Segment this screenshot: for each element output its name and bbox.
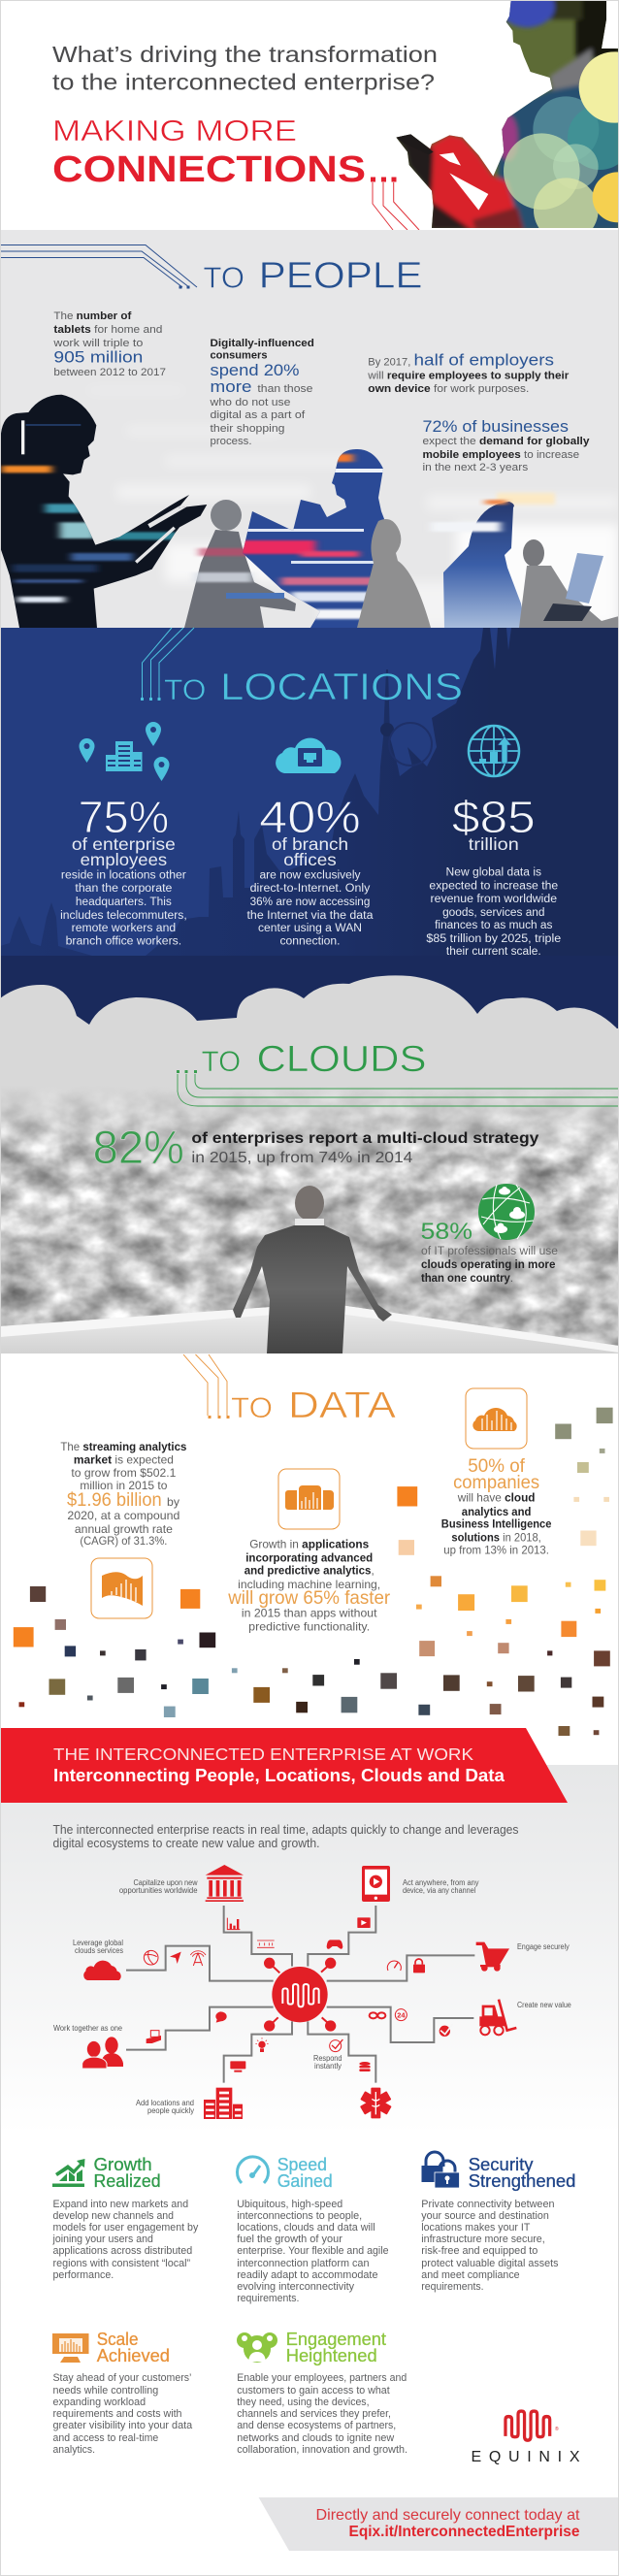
stat: 58%: clouds operating in more [421, 1259, 555, 1271]
stat: 58% [421, 1219, 558, 1285]
stat: 75% employees: branch office workers. [66, 936, 181, 948]
diagram labels: Create new value [517, 2001, 571, 2009]
banner: interconnected enterprise at work: Interconnecting People, Locations, Clouds and Data [53, 1766, 505, 1785]
text [52, 2372, 193, 2456]
text: streaming analytics: market is expected [74, 1453, 174, 1467]
stat: consumers: Digitally-influenced [210, 338, 314, 349]
stat: consumers [209, 338, 314, 447]
hub: equinix logo [272, 1967, 328, 2022]
text [421, 2199, 559, 2293]
heading: to clouds: TO [202, 1046, 241, 1078]
stat: $85 trillion: goods, services and [442, 907, 545, 919]
banner: interconnected enterprise at work: THE INTERCONNECTED ENTERPRISE AT WORK [53, 1745, 473, 1764]
icon: forklift [479, 2000, 516, 2035]
stat: employers: will require employees to supply their [367, 371, 570, 382]
title [52, 114, 366, 190]
spokes with nodes [265, 1959, 335, 2031]
diagram labels: Work together as one [53, 2024, 123, 2033]
text: risk-free and equipped to [421, 2245, 538, 2257]
heading: Growth [93, 2154, 152, 2174]
heading: Achieved [97, 2345, 170, 2365]
diagram: interconnection network [53, 1865, 571, 2119]
text: streaming analytics: million in 2015 to [80, 1479, 168, 1492]
stat: tablets [52, 310, 166, 378]
panel: to locations [0, 628, 619, 1045]
panel: to data [0, 1353, 619, 1736]
text: locations makes your IT [421, 2222, 531, 2234]
stat: consumers: process. [210, 436, 252, 447]
heading [277, 2154, 333, 2191]
text: develop new channels and [52, 2210, 174, 2222]
icon: server analytics [278, 1469, 340, 1529]
block: security strengthened [421, 2152, 575, 2293]
heading [469, 2154, 575, 2191]
stat: 58%: than one country. [421, 1273, 513, 1285]
text: readily adapt to accommodate [237, 2269, 378, 2281]
heading: to locations: LOCATIONS [220, 667, 463, 708]
small icons along the lines [144, 1917, 453, 2072]
heading: Engagement [286, 2329, 386, 2349]
stat: 40% branch offices: connection. [279, 936, 340, 948]
stat: tablets: The number of [53, 310, 132, 322]
heading: Strengthened [469, 2170, 575, 2191]
banner: interconnected enterprise at work [0, 1728, 568, 1803]
circuit lines: green [177, 1070, 619, 1106]
heading: to people: TO [204, 261, 244, 295]
stat: 75% employees: remote workers and [72, 923, 176, 934]
heading: to data [231, 1386, 397, 1426]
stat: 40% branch offices: center using a WAN [258, 923, 362, 934]
icon: people circles [237, 2332, 277, 2363]
text: streaming analytics: (CAGR) of 31.3%. [80, 1534, 167, 1548]
icon: flag analytics [91, 1558, 152, 1618]
text: infrastructure more secure, [421, 2234, 545, 2245]
silhouette: blue man right [431, 500, 525, 628]
text: cloud analytics: will have cloud [457, 1490, 535, 1504]
terrace wall [0, 1305, 619, 1353]
text: cloud analytics: Business Intelligence [441, 1517, 552, 1531]
connector lines [126, 1906, 474, 2083]
icon: cloud analytics [466, 1388, 527, 1449]
heading [97, 2329, 170, 2365]
text: your source and destination [421, 2210, 549, 2222]
stat: $85 trillion: revenue from worldwide [431, 894, 557, 905]
diagram labels [53, 1878, 571, 2115]
text: customers to gain access to what [237, 2385, 390, 2397]
stat: 75% employees: employees [81, 850, 167, 869]
stat: $85 trillion: trillion [469, 834, 519, 854]
diagram labels: Leverage global [73, 1939, 123, 1947]
diagram labels: Add locations and [136, 2099, 194, 2107]
orange streak [497, 493, 555, 505]
text: greater visibility into your data [52, 2420, 193, 2431]
text: streaming analytics: $1.96 billion [67, 1490, 162, 1511]
text: collaboration, innovation and growth. [237, 2444, 407, 2456]
panel: to people [0, 230, 619, 634]
text: requirements and costs with [52, 2408, 182, 2420]
text: predictive analytics: and predictive analytics, [244, 1564, 375, 1578]
text: enterprise. Your flexible and agile [237, 2245, 388, 2257]
stat: 40% branch offices: 40% [259, 792, 361, 842]
text: protect valuable digital assets [421, 2258, 559, 2269]
text: streaming analytics: The streaming analytics [60, 1440, 187, 1453]
call to action [259, 2497, 619, 2551]
stat: 40% branch offices: offices [283, 850, 337, 869]
heading: to people: PEOPLE [259, 256, 423, 297]
text: cloud analytics: 50% of [468, 1456, 526, 1477]
title: CONNECTIONS [52, 149, 366, 190]
text: cloud analytics [441, 1456, 552, 1556]
text: needs while controlling [52, 2385, 158, 2397]
text: streaming analytics: annual growth rate [75, 1522, 173, 1536]
heading [286, 2329, 386, 2365]
heading: to data: DATA [288, 1386, 397, 1426]
diagram labels: clouds services [75, 1946, 123, 1955]
stat: employers: own device for work purposes. [368, 383, 529, 395]
heading: to clouds: CLOUDS [256, 1039, 427, 1080]
skyline silhouette [0, 628, 619, 1043]
text: Enable your employees, partners and [237, 2372, 407, 2384]
text: predictive analytics [227, 1538, 391, 1634]
text: evolving interconnectivity [237, 2281, 355, 2293]
text: applications across distributed [52, 2245, 192, 2257]
heading: Scale [97, 2329, 138, 2349]
panel: to clouds [0, 975, 619, 1353]
stat: 40% branch offices: of branch [272, 834, 348, 854]
text: expanding workload [52, 2397, 146, 2408]
stat: 75% employees [60, 792, 187, 948]
icon: green cloud globe [478, 1184, 535, 1240]
text: predictive analytics: in 2015 than apps without [242, 1606, 377, 1619]
text: networks and clouds to ignite new [237, 2432, 394, 2444]
stat: consumers: their shopping [210, 423, 285, 435]
text: cloud analytics: companies [453, 1473, 539, 1493]
logo: equinix [472, 2411, 580, 2465]
text: Private connectivity between [421, 2199, 555, 2210]
text: cloud analytics: solutions in 2018, [451, 1531, 541, 1545]
text [237, 2199, 388, 2304]
text: analytics. [52, 2444, 95, 2456]
heading: Security [469, 2154, 534, 2174]
call to action: Directly and securely connect today at [316, 2507, 580, 2524]
silhouette: gray man and laptop [519, 539, 619, 628]
diagram labels: Respond [313, 2054, 342, 2063]
text: streaming analytics [60, 1440, 187, 1548]
diagram labels: instantly [314, 2062, 342, 2071]
stat: 40% branch offices [246, 792, 374, 948]
cloud fade [0, 1028, 619, 1155]
stat: $85 trillion: $85 [452, 792, 536, 842]
stat: 75% employees: of enterprise [72, 834, 176, 854]
stat: consumers: than those [257, 383, 312, 395]
stat: consumers: who do not use [209, 397, 291, 408]
text: cloud analytics: analytics and [462, 1505, 531, 1518]
stat: businesses: expect the demand for globally [423, 436, 590, 447]
panel: header [52, 1, 618, 230]
clouds photo texture [0, 1028, 619, 1353]
silhouette: gray man walking [184, 500, 296, 628]
stat: 58%: of IT professionals will use [421, 1246, 558, 1257]
stat: 75% employees: headquarters. This [76, 897, 172, 908]
heading: to people [204, 256, 423, 297]
text: Stay ahead of your customers’ [52, 2372, 191, 2384]
call to action: Eqix.it/InterconnectedEnterprise [349, 2524, 580, 2540]
text: predictive analytics: incorporating advanced [245, 1551, 373, 1565]
heading question: What’s driving the transformation [52, 42, 438, 67]
text: predictive analytics: including machine learning, [238, 1578, 380, 1591]
text: regions with consistent “local” [52, 2258, 190, 2269]
logo: equinix: ® [555, 2426, 559, 2432]
text: predictive analytics: will grow 65% faster [227, 1588, 391, 1609]
stat: $85 trillion: their current scale. [446, 946, 541, 958]
block: speed gained [237, 2154, 388, 2304]
circuit lines: blue [0, 245, 197, 288]
text: requirements. [421, 2281, 484, 2293]
text: intro: The interconnected enterprise reacts in real time, adapts quickly to change and leverages [52, 1823, 518, 1837]
heading: to data: TO [231, 1392, 273, 1424]
stat: $85 trillion: $85 trillion by 2025, triple [426, 933, 561, 945]
stat: 40% branch offices: direct-to-Internet. Only [250, 883, 371, 895]
stat: 75% employees: than the corporate [75, 883, 172, 895]
stat: 58%: 58% [421, 1219, 472, 1245]
stat: consumers: digital as a part of [210, 409, 306, 421]
man from behind [233, 1186, 392, 1353]
stat: employers: By 2017, [368, 357, 410, 369]
icon: cloud with port [276, 738, 341, 773]
stat: tablets: work will triple to [52, 338, 143, 349]
stat: consumers: consumers [210, 349, 268, 361]
text: and meet compliance [421, 2269, 520, 2281]
text [237, 2372, 407, 2456]
block: engagement heightened [237, 2329, 407, 2456]
diagram labels: device, via any channel [403, 1886, 475, 1895]
heading question [52, 42, 438, 95]
stat: businesses: mobile employees to increase [423, 449, 579, 461]
stat: 40% branch offices: are now exclusively [260, 870, 361, 882]
stat: tablets: between 2012 to 2017 [53, 367, 166, 378]
stat: 82% multi-cloud [93, 1123, 539, 1174]
icon: gauge [237, 2157, 268, 2183]
stat: 82% multi-cloud: 82% [93, 1123, 184, 1174]
text: streaming analytics: by [167, 1495, 179, 1509]
text: predictive analytics: predictive functionality. [248, 1620, 370, 1634]
icon: medical star [360, 2088, 392, 2118]
logo: equinix: EQUINIX [472, 2449, 580, 2465]
stat: 82% multi-cloud: in 2015, up from 74% in 2014 [191, 1150, 413, 1166]
icon: cloud [83, 1961, 121, 1980]
text: streaming analytics: 2020, at a compound [67, 1509, 179, 1522]
background light streaks [87, 388, 619, 628]
stat: businesses: in the next 2-3 years [423, 462, 529, 473]
diagram labels: Engage securely [517, 1942, 570, 1951]
icon: tablet [362, 1866, 390, 1902]
circuit lines: orange [183, 1354, 229, 1418]
diagram labels: people quickly [147, 2106, 194, 2115]
text: interconnection platform can [237, 2258, 369, 2269]
stat: employers: half of employers [413, 351, 554, 370]
diagram labels: Act anywhere, from any [403, 1878, 479, 1887]
panel: interconnected enterprise background [0, 1765, 619, 2134]
data squares [14, 1408, 613, 1736]
stat: 40% branch offices: 36% are now accessing [250, 897, 370, 908]
heading question: to the interconnected enterprise? [52, 70, 435, 95]
stat: 40% branch offices: the Internet via the data [246, 910, 374, 922]
block: growth realized [52, 2154, 199, 2281]
icon: padlocks [421, 2152, 460, 2188]
stat: tablets: 905 million [53, 348, 143, 367]
stat: $85 trillion: finances to as much as [435, 920, 553, 931]
icon: growth chart [52, 2159, 85, 2187]
stat: $85 trillion [426, 792, 561, 958]
photo: man with phone and bokeh [396, 1, 618, 228]
stat: 82% multi-cloud: of enterprises report a multi-cloud strategy [191, 1130, 539, 1147]
stat: businesses [423, 417, 590, 473]
text: they need, using the devices, [237, 2397, 369, 2408]
stat: 75% employees: includes telecommuters, [60, 910, 187, 922]
cloud top outline [0, 975, 619, 1038]
diagram labels: opportunities worldwide [119, 1886, 198, 1895]
stat: $85 trillion: expected to increase the [429, 881, 558, 893]
heading [93, 2154, 161, 2191]
text: interconnections to people, [237, 2210, 362, 2222]
text: streaming analytics: to grow from $502.1 [71, 1466, 177, 1480]
stat: businesses: 72% of businesses [423, 417, 569, 436]
icon: globe with growth chart [469, 726, 519, 776]
text: performance. [52, 2269, 114, 2281]
icon: people [82, 2037, 123, 2069]
text: locations, clouds and data will [237, 2222, 375, 2234]
heading: to clouds [202, 1039, 427, 1080]
text: Ubiquitous, high-speed [237, 2199, 342, 2210]
stat: tablets: tablets for home and [53, 324, 162, 336]
text: and access to real-time [52, 2432, 158, 2444]
text: and dense ecosystems of partners, [237, 2420, 396, 2431]
text: intro [52, 1823, 518, 1850]
text: fuel the growth of your [237, 2234, 342, 2245]
title: MAKING MORE [52, 114, 297, 147]
text: channels and services they prefer, [237, 2408, 391, 2420]
text: requirements. [237, 2293, 299, 2304]
heading: Speed [277, 2154, 327, 2174]
text: models for user engagement by [52, 2222, 199, 2234]
stat: employers [367, 351, 570, 395]
heading: Heightened [286, 2345, 377, 2365]
circuit lines: red [371, 177, 419, 230]
text [52, 2199, 199, 2281]
icon: map pins and buildings [80, 722, 169, 781]
text: intro: digital ecosystems to create new value and growth. [52, 1837, 320, 1850]
stat: 75% employees: reside in locations other [61, 870, 186, 882]
text: Expand into new markets and [52, 2199, 188, 2210]
heading: Realized [93, 2170, 161, 2191]
stat: $85 trillion: New global data is [446, 867, 541, 879]
text: joining your users and [52, 2234, 153, 2245]
circuit lines: light blue [141, 628, 194, 701]
icon: buildings [204, 2088, 243, 2119]
diagram labels: Capitalize upon new [134, 1878, 198, 1887]
block: scale achieved [52, 2329, 193, 2456]
icon: scale monitor [52, 2333, 89, 2363]
silhouette: gray woman [357, 519, 431, 628]
icon: cart [476, 1942, 509, 1972]
silhouette: blue man with papers [243, 449, 384, 628]
silhouette: woman with tablet [0, 388, 213, 634]
heading: to locations: TO [164, 674, 206, 706]
small icons along the lines: 24 [397, 2010, 406, 2019]
stat: 75% employees: 75% [79, 792, 169, 842]
stat: consumers: spend 20% [210, 361, 299, 379]
heading: Gained [277, 2170, 333, 2191]
text: predictive analytics: Growth in applications [249, 1538, 370, 1551]
stat: consumers: more [210, 377, 252, 396]
icon: bank [206, 1865, 244, 1902]
text: cloud analytics: up from 13% in 2013. [443, 1543, 549, 1556]
